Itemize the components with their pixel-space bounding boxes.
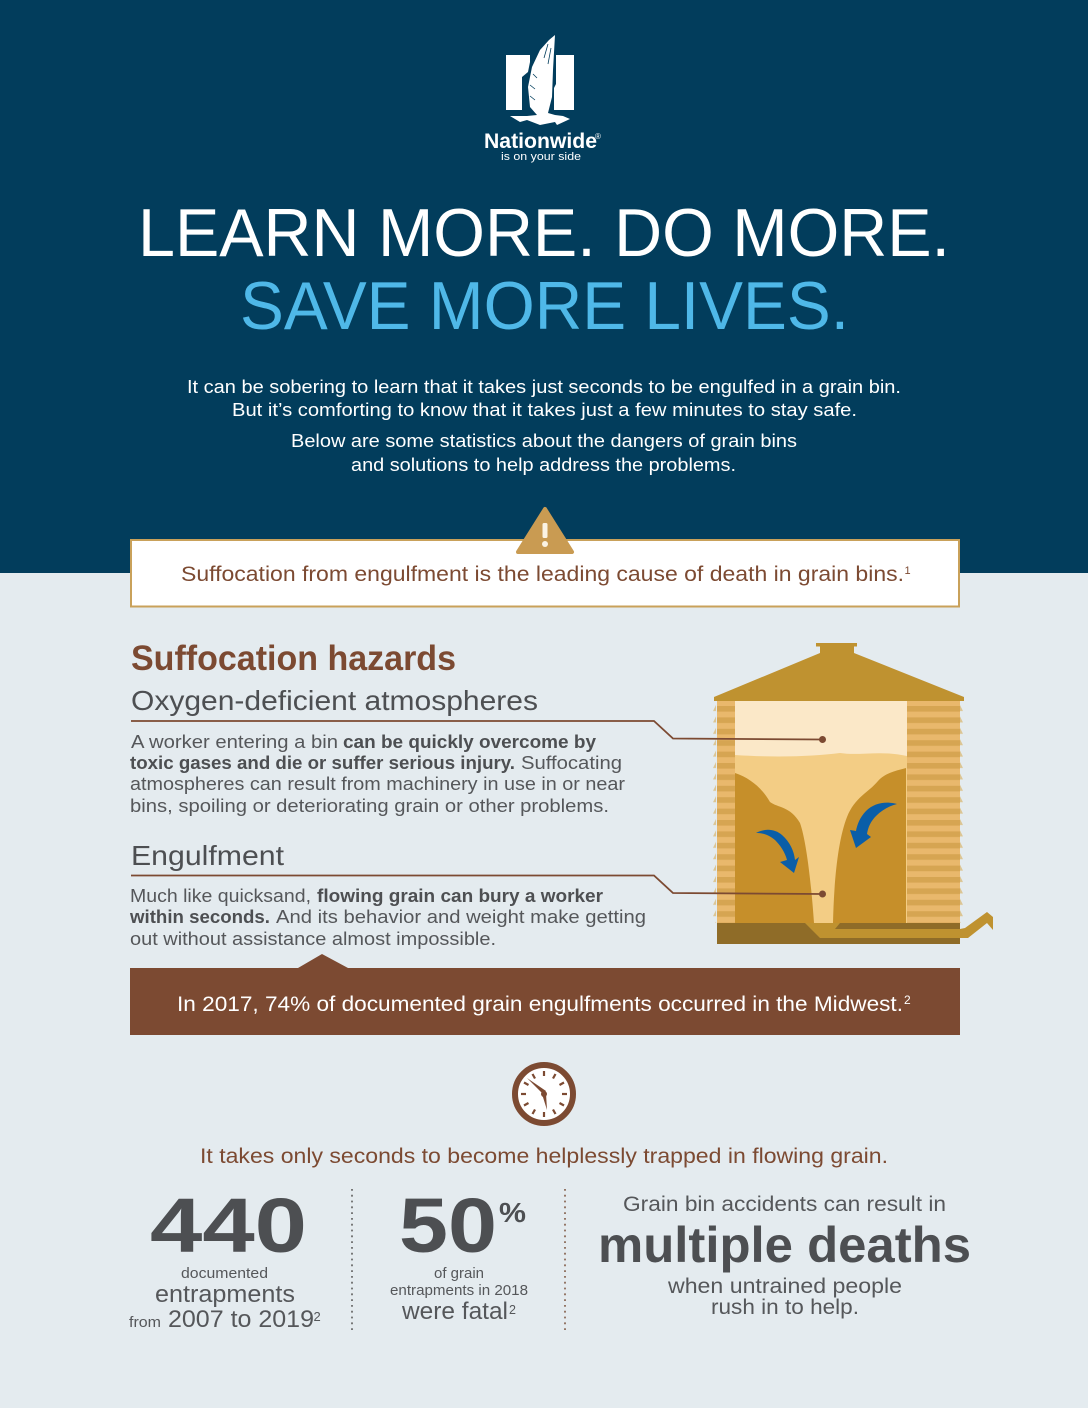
stat: 50 percent: %	[499, 1197, 526, 1228]
stat: 50 percent: 2	[509, 1303, 516, 1317]
dark grain left	[735, 773, 814, 923]
arrow: grain flow left	[756, 830, 799, 873]
stat: 50 percent: 50	[399, 1183, 497, 1269]
tagline: is on your side	[501, 151, 581, 163]
stat: multiple deaths: multiple deaths	[598, 1217, 971, 1273]
stat: 50 percent: entrapments in 2018	[390, 1282, 528, 1299]
text: oxygen paragraph: A worker entering a bin	[131, 732, 338, 752]
stat: 440 entrapments: 2	[314, 1309, 321, 1324]
stat: 440 entrapments	[129, 1183, 321, 1333]
heading: Suffocation hazards: Suffocation hazards	[131, 639, 456, 678]
stat: 440 entrapments: 440	[150, 1183, 307, 1269]
stat: 440 entrapments: from	[129, 1315, 161, 1331]
text: engulfment paragraph	[129, 886, 646, 949]
logo: Nationwide	[484, 35, 601, 163]
text: engulfment paragraph: flowing grain can bury a worker	[317, 886, 603, 906]
banner: Midwest statistic: 2	[904, 993, 911, 1007]
intro text: But it’s comforting to know that it takes just a few minutes to stay safe.	[232, 400, 857, 420]
roof	[714, 643, 964, 701]
banner: Midwest statistic: In 2017, 74% of documented grain engulfments occurred in the Midwest.	[177, 993, 903, 1016]
divider dotted right	[564, 1189, 566, 1332]
subheading: Engulfment: Engulfment	[131, 840, 284, 871]
text: oxygen paragraph: bins, spoiling or deteriorating grain or other problems.	[130, 796, 609, 816]
intro text: and solutions to help address the problems.	[351, 455, 736, 475]
pipe	[805, 912, 993, 938]
text: engulfment paragraph: within seconds.	[129, 907, 270, 927]
divider dotted left	[351, 1189, 353, 1332]
illustration: grain bin	[713, 643, 993, 944]
banner: Midwest statistic	[130, 954, 960, 1035]
stat: multiple deaths	[598, 1192, 971, 1319]
stat: 440 entrapments: entrapments	[155, 1281, 295, 1308]
intro text: It can be sobering to learn that it takes just seconds to be engulfed in a grain bin.	[187, 377, 901, 397]
stat: multiple deaths: Grain bin accidents can result in	[623, 1192, 946, 1216]
text: oxygen paragraph: can be quickly overcome by	[343, 732, 596, 752]
title: LEARN MORE. DO MORE.	[138, 195, 950, 271]
bin air space	[735, 700, 907, 760]
callout: leading cause of death: Suffocation from engulfment is the leading cause of death in grain bins.	[181, 563, 904, 586]
text: oxygen paragraph: Suffocating	[521, 753, 622, 773]
title	[138, 195, 950, 344]
title: SAVE MORE LIVES.	[240, 268, 849, 344]
stat: 50 percent: of grain	[434, 1265, 484, 1282]
icon: warning triangle	[518, 509, 572, 552]
text: engulfment paragraph: out without assistance almost impossible.	[130, 929, 496, 949]
icon: N and eagle	[506, 35, 574, 125]
stat: 440 entrapments: 2007 to 2019	[168, 1306, 314, 1333]
text: trapped statement: It takes only seconds to become helplessly trapped in flowing grain.	[200, 1144, 888, 1168]
stat: multiple deaths: when untrained people	[667, 1274, 902, 1298]
dark grain right	[833, 768, 906, 923]
callout: leading cause of death	[131, 509, 959, 606]
bin floor	[717, 923, 960, 944]
leader line: oxygen	[131, 721, 826, 743]
stat: 50 percent: were fatal	[401, 1298, 508, 1325]
leader line: engulfment	[131, 876, 826, 898]
text: oxygen paragraph: toxic gases and die or suffer serious injury.	[130, 753, 515, 773]
arrow: grain flow right	[850, 803, 897, 848]
stat: multiple deaths: rush in to help.	[711, 1295, 859, 1319]
icon: clock	[515, 1065, 573, 1123]
stat: 440 entrapments: documented	[181, 1265, 268, 1282]
registered mark: ®	[595, 132, 601, 141]
header band	[0, 0, 1088, 573]
text: engulfment paragraph: Much like quicksand,	[130, 886, 311, 906]
intro text: Below are some statistics about the dangers of grain bins	[291, 431, 797, 451]
callout: leading cause of death: 1	[904, 565, 911, 577]
text: oxygen paragraph	[130, 732, 625, 816]
text: engulfment paragraph: And its behavior and weight make getting	[276, 907, 646, 927]
bin walls	[713, 701, 964, 923]
text: oxygen paragraph: atmospheres can result from machinery in use in or near	[130, 774, 625, 794]
subheading: Oxygen-deficient atmospheres: Oxygen-deficient atmospheres	[131, 685, 538, 716]
intro text	[187, 377, 901, 475]
wordmark: Nationwide	[484, 130, 597, 153]
light grain	[735, 753, 907, 923]
stat: 50 percent	[390, 1183, 528, 1325]
